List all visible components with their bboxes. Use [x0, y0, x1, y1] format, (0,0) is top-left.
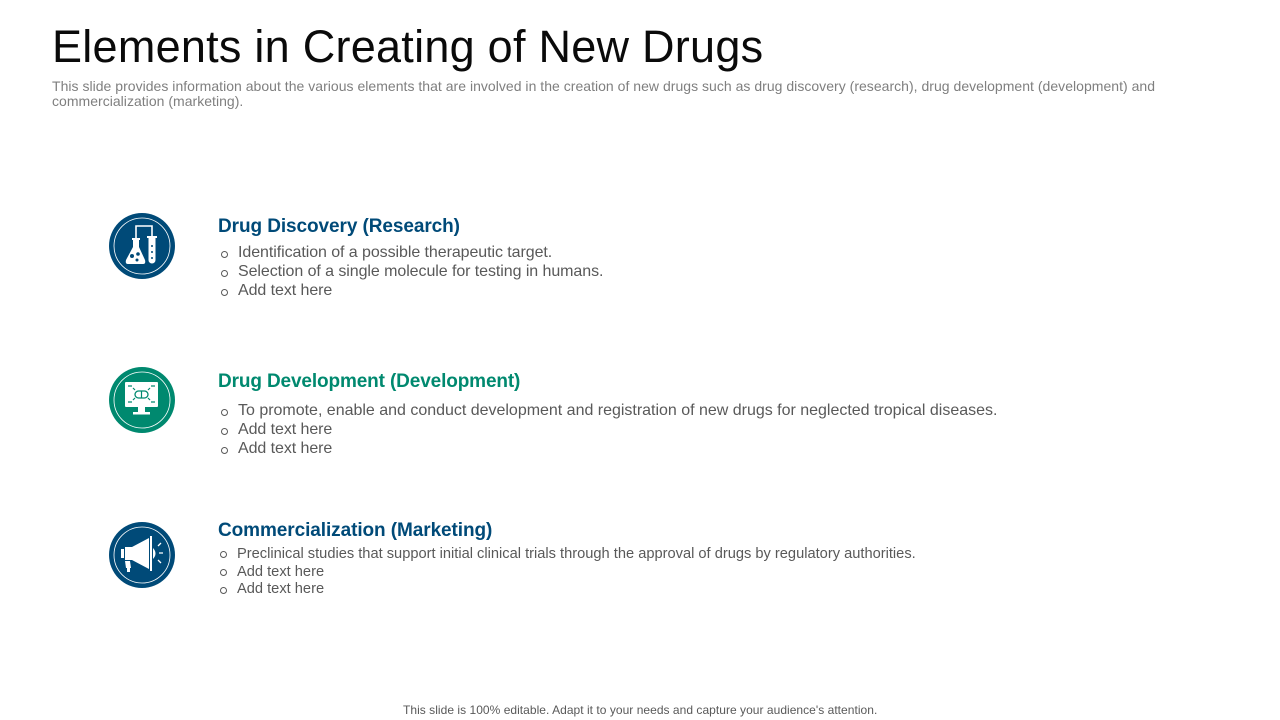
subtitle text: [52, 78, 1155, 109]
bullet list: drug development: Add text here: [238, 421, 332, 438]
bullet list: commercialization: [220, 546, 916, 597]
bullet list: commercialization: Preclinical studies that support initial clinical trials through the approval of drugs by regulatory authorities.: [237, 546, 916, 562]
bullet list: commercialization: Add text here: [237, 581, 324, 597]
icon: flask and test tube: [109, 213, 175, 279]
bullet list: drug discovery: Selection of a single molecule for testing in humans.: [238, 263, 603, 280]
bullet list: commercialization: Add text here: [237, 564, 324, 580]
icon: megaphone: [109, 522, 175, 588]
bullet list: drug discovery: Identification of a possible therapeutic target.: [238, 244, 552, 261]
subtitle text: This slide provides information about the various elements that are involved in the creation of new drugs such as drug discovery (research), drug development (development) and: [52, 78, 1155, 94]
title: Elements in Creating of New Drugs: [52, 21, 763, 72]
subtitle text: commercialization (marketing).: [52, 93, 243, 109]
bullet list: drug development: To promote, enable and conduct development and registration of new drugs for neglected tropical diseases.: [238, 402, 997, 419]
bullet list: drug discovery: Add text here: [238, 282, 332, 299]
heading: commercialization: Commercialization (Marketing): [218, 520, 492, 541]
panel: drug discovery: [109, 213, 175, 279]
heading: drug discovery: Drug Discovery (Research): [218, 216, 460, 237]
icon: monitor with capsule: [109, 367, 175, 433]
heading: drug development: Drug Development (Development): [218, 371, 520, 392]
bullet list: drug development: Add text here: [238, 440, 332, 457]
bullet list: drug discovery: [221, 244, 603, 299]
footer note: This slide is 100% editable. Adapt it to your needs and capture your audience's attention.: [403, 703, 877, 717]
bullet list: drug development: [221, 402, 997, 457]
